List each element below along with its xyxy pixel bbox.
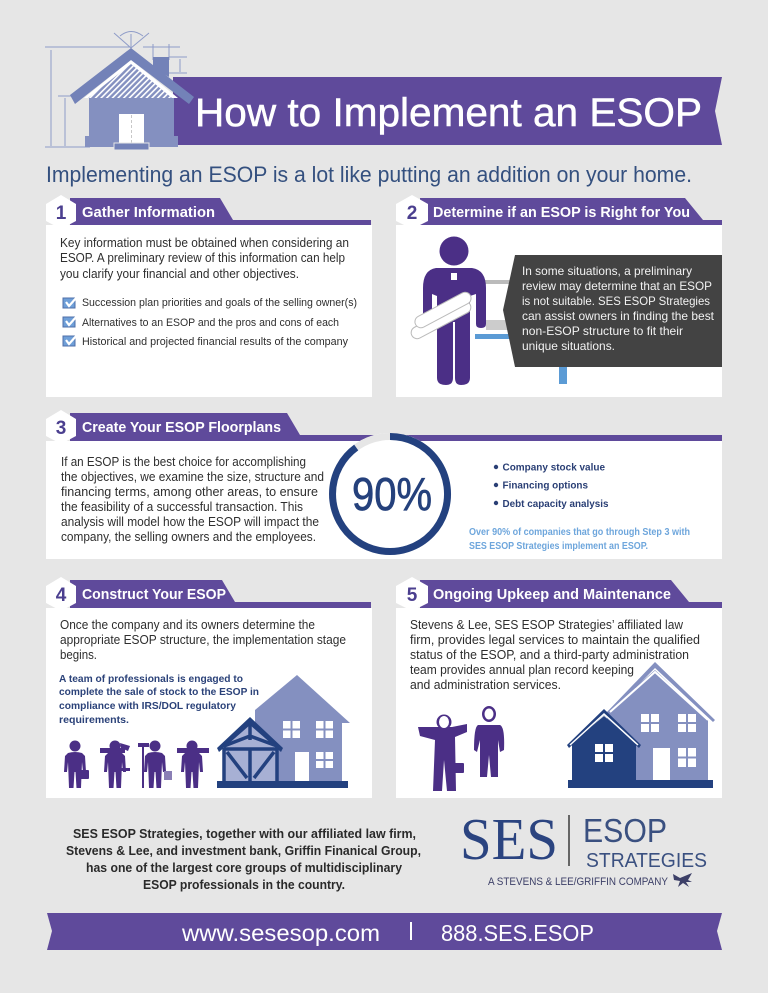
callout: review may determine that an ESOP — [522, 279, 712, 293]
panel 4: construct — [46, 577, 372, 798]
body text: the feasibility of a successful transaction. This — [61, 500, 303, 514]
heading 4: 4 — [56, 585, 67, 606]
footer banner: 888.SES.ESOP — [441, 920, 594, 946]
panel 5: upkeep — [396, 577, 722, 798]
footer banner: www.sesesop.com — [181, 920, 380, 946]
title banner — [173, 77, 722, 145]
heading 2: Determine if an ESOP is Right for You — [433, 204, 690, 221]
body text: company, the selling owners and the employees. — [61, 530, 316, 544]
note: Over 90% of companies that go through Step 3 with — [469, 527, 690, 538]
closing statement: Stevens & Lee, and investment bank, Griffin Finanical Group, — [66, 844, 421, 858]
note — [469, 527, 690, 552]
icon: two maintenance workers — [418, 706, 504, 791]
heading 3 — [46, 410, 722, 444]
heading 5: Ongoing Upkeep and Maintenance — [433, 586, 671, 603]
body text: Stevens & Lee, SES ESOP Strategies’ affiliated law — [410, 618, 684, 632]
body text: appropriate ESOP structure, the implementation stage — [60, 633, 346, 647]
checklist: Alternatives to an ESOP and the pros and cons of each — [82, 317, 339, 329]
title: How to Implement an ESOP — [195, 91, 702, 135]
body text: the objectives, we examine the size, structure and — [61, 470, 324, 484]
body text: team provides annual plan record keeping — [410, 663, 634, 677]
heading 1: Gather Information — [82, 204, 215, 221]
checklist: Historical and projected financial results of the company — [82, 336, 348, 348]
highlight text: requirements. — [59, 714, 129, 726]
checklist — [63, 297, 357, 348]
heading 5: 5 — [407, 585, 418, 606]
subtitle: Implementing an ESOP is a lot like putting an addition on your home. — [46, 162, 692, 187]
highlight text: compliance with IRS/DOL regulatory — [59, 700, 236, 712]
bullet list: Debt capacity analysis — [502, 498, 609, 510]
heading 3: Create Your ESOP Floorplans — [82, 419, 281, 436]
body text — [61, 455, 324, 544]
bullet list — [494, 462, 609, 510]
bullet list: Financing options — [502, 480, 588, 492]
icon: desk — [475, 280, 567, 384]
highlight text — [59, 673, 259, 726]
callout: non-ESOP structure to fit their — [522, 324, 683, 338]
body text: firm, provides legal services to maintain the qualified — [410, 633, 700, 647]
heading 4: Construct Your ESOP — [82, 586, 226, 603]
ring chart: 90% — [329, 433, 451, 555]
body text — [410, 618, 700, 692]
body text: Once the company and its owners determine the — [60, 618, 315, 632]
heading 1: 1 — [56, 203, 67, 224]
heading 2: 2 — [407, 203, 417, 224]
heading 5 — [396, 577, 722, 611]
highlight text: A team of professionals is engaged to — [59, 673, 243, 685]
body text: If an ESOP is the best choice for accomplishing — [61, 455, 306, 469]
heading 4 — [46, 577, 371, 611]
icon: griffin — [673, 873, 692, 887]
panel 3: floorplans — [46, 410, 722, 559]
highlight text: complete the sale of stock to the ESOP in — [59, 686, 259, 698]
intro text: Key information must be obtained when considering an — [60, 236, 349, 250]
closing statement: has one of the largest core groups of multidisciplinary — [86, 861, 402, 875]
panel 2: determine if right — [396, 195, 722, 397]
closing statement: SES ESOP Strategies, together with our affiliated law firm, — [73, 827, 416, 841]
callout: In some situations, a preliminary — [522, 264, 692, 278]
closing statement — [66, 827, 421, 892]
icon: person with blueprints — [409, 236, 486, 385]
icon: house blueprint — [45, 32, 194, 150]
body text: analysis will model how the ESOP will impact the — [61, 515, 319, 529]
logo: SES ESOP Strategies: STRATEGIES — [586, 850, 707, 872]
heading 2 — [396, 195, 722, 229]
logo: SES ESOP Strategies: SES — [460, 806, 558, 872]
icon: house with finished addition — [567, 662, 715, 788]
intro text: you clarify your financial and other objectives. — [60, 267, 299, 281]
bullet list: Company stock value — [502, 462, 605, 474]
icon: house with timber addition — [217, 675, 350, 788]
heading 3: 3 — [56, 418, 66, 439]
callout: can assist owners in finding the best — [522, 309, 715, 323]
body text: begins. — [60, 648, 97, 662]
footer banner — [47, 913, 722, 950]
panel 1: gather information — [46, 195, 372, 397]
checklist: Succession plan priorities and goals of the selling owner(s) — [82, 297, 357, 309]
closing statement: ESOP professionals in the country. — [143, 878, 345, 892]
body text — [60, 618, 346, 662]
body text: and administration services. — [410, 678, 561, 692]
note: SES ESOP Strategies implement an ESOP. — [469, 541, 648, 552]
body text: financing terms, among other areas, to ensure — [61, 485, 318, 499]
callout: is not suitable. SES ESOP Strategies — [522, 294, 710, 308]
intro text: ESOP. A preliminary review of this information can help — [60, 251, 345, 265]
ring chart: 90%: 90% — [352, 468, 432, 520]
logo: SES ESOP Strategies — [460, 806, 707, 888]
logo: SES ESOP Strategies: A STEVENS & LEE/GRIFFIN COMPANY — [488, 876, 669, 888]
body text: status of the ESOP, and a third-party administration — [410, 648, 689, 662]
icon: four workers — [64, 740, 209, 788]
callout: unique situations. — [522, 339, 615, 353]
heading 1 — [46, 195, 371, 229]
callout — [503, 255, 722, 367]
logo: SES ESOP Strategies: ESOP — [583, 812, 667, 849]
intro text — [60, 236, 349, 281]
